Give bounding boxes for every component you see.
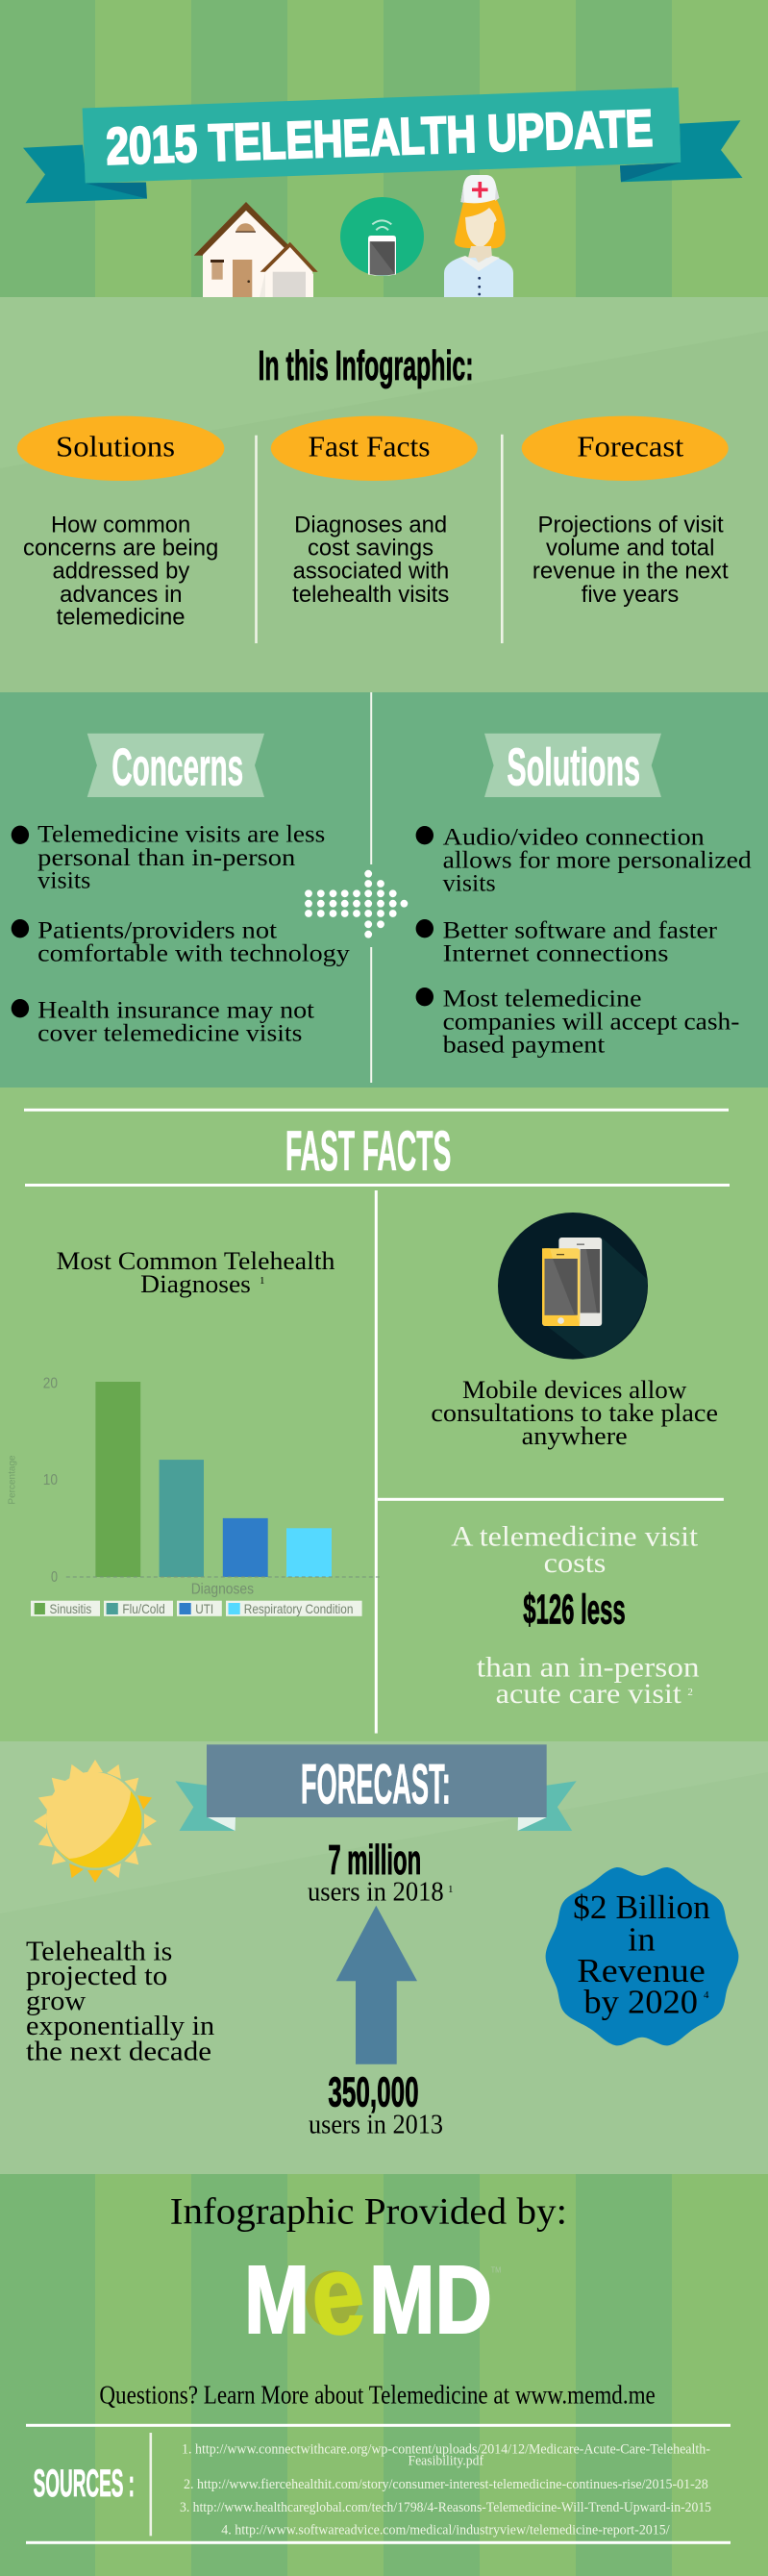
- text: 7 million: 1: [448, 1884, 454, 1895]
- icon: house: [194, 202, 318, 297]
- text: fast facts description: telehealth visits: [292, 583, 449, 608]
- header section: [0, 0, 768, 297]
- text: telehealth projection: exponentially in: [26, 2011, 215, 2041]
- text: solutions description: concerns are being: [23, 537, 218, 562]
- solution 2: [416, 918, 718, 966]
- solution 2: Better software and faster: [443, 918, 718, 944]
- concerns ribbon heading: [87, 734, 264, 797]
- oval: forecast: [522, 416, 729, 481]
- text: telehealth projection: the next decade: [26, 2036, 211, 2066]
- text: telehealth projection: projected to: [26, 1961, 167, 1991]
- oval: solutions: [17, 416, 224, 481]
- text: forecast description: Projections of visit: [538, 513, 724, 538]
- banner right fold: [620, 163, 681, 182]
- badge: revenue: 4: [704, 1989, 709, 2001]
- ribbon folds: [208, 1817, 547, 1831]
- solution 3: Most telemedicine: [443, 986, 642, 1012]
- chart title: 1: [260, 1275, 265, 1287]
- solution 3: companies will accept cash-: [443, 1010, 739, 1036]
- text: forecast description: [533, 513, 729, 608]
- heading: In this Infographic:: [258, 342, 473, 389]
- y axis labels: [43, 1376, 58, 1586]
- text: telehealth projection: [26, 1936, 215, 2066]
- icon: sun: [34, 1760, 157, 1883]
- icon: mobile phones: [498, 1213, 648, 1360]
- text: 350,000: users in 2013: [309, 2111, 443, 2140]
- list: sources: [180, 2442, 711, 2538]
- panel: fast facts: [0, 1088, 768, 1741]
- concerns list: [12, 822, 350, 1047]
- bar: respiratory condition: [286, 1528, 332, 1577]
- icon: nurse: [444, 175, 513, 297]
- text: solutions description: telemedicine: [57, 606, 186, 631]
- solutions ribbon heading: Solutions: [507, 738, 640, 797]
- solution 1: allows for more personalized: [443, 848, 752, 874]
- solution 1: Audio/video connection: [443, 825, 705, 851]
- text: 7 million: [308, 1837, 454, 1908]
- solution 1: visits: [443, 871, 496, 897]
- banner left fold: [86, 183, 147, 199]
- text: forecast description: revenue in the next: [533, 560, 729, 585]
- text: fast facts description: associated with: [293, 560, 449, 585]
- text: provided by: Infographic Provided by:: [170, 2190, 567, 2232]
- forecast ribbon: [207, 1744, 547, 1817]
- text: solutions description: advances in: [60, 583, 183, 608]
- badge: revenue: Revenue: [577, 1952, 706, 1989]
- list: sources: Feasibility.pdf: [408, 2454, 483, 2469]
- arrow: growth: [336, 1906, 417, 2064]
- text: questions: Questions? Learn More about Telemedicine at www.memd.me: [99, 2380, 656, 2409]
- text: fast facts description: Diagnoses and: [294, 513, 447, 538]
- concern 1: [12, 822, 325, 893]
- list: sources: 1. http://www.connectwithcare.org/wp-content/uploads/2014/12/Medicare-Acute-Care-Telehealth-: [182, 2442, 710, 2458]
- text: forecast description: five years: [582, 583, 679, 608]
- solution 2: Internet connections: [443, 940, 669, 966]
- text: mobile devices: [431, 1376, 718, 1450]
- text: fast facts description: [292, 513, 449, 608]
- text: 7 million: users in 2018: [308, 1878, 444, 1908]
- concern 1: visits: [37, 867, 90, 893]
- concern 2: [12, 918, 350, 966]
- text: mobile devices: Mobile devices allow: [462, 1376, 687, 1404]
- chart title: [57, 1247, 334, 1298]
- y axis labels: 10: [43, 1472, 58, 1488]
- oval: solutions: Solutions: [56, 429, 175, 463]
- solution 1: [416, 825, 752, 897]
- y axis labels: 20: [43, 1376, 58, 1392]
- text: telemedicine cost: acute care visit: [496, 1678, 682, 1710]
- concerns ribbon heading: Concerns: [111, 738, 243, 797]
- logo: MeMD: M: [244, 2246, 310, 2354]
- panel: fast facts: FAST FACTS: [285, 1120, 451, 1183]
- concern 1: personal than in-person: [37, 845, 296, 871]
- bar: flu/cold: [160, 1460, 204, 1577]
- text: mobile devices: anywhere: [522, 1422, 628, 1450]
- text: telemedicine cost: $126 less: [523, 1587, 626, 1634]
- text: 7 million: 7 million: [328, 1837, 421, 1884]
- panel: footer: [0, 2174, 768, 2576]
- panel: concerns and solutions: [0, 692, 768, 1088]
- solution 3: based payment: [443, 1032, 605, 1058]
- text: telemedicine cost: 2: [687, 1687, 693, 1698]
- panel: forecast: [0, 1741, 768, 2174]
- oval: fast facts: Fast Facts: [308, 429, 431, 463]
- concern 3: cover telemedicine visits: [37, 1021, 302, 1047]
- text: telemedicine cost: [451, 1521, 700, 1710]
- arrow: dotted right arrow: [305, 870, 408, 938]
- text: 350,000: [309, 2069, 443, 2140]
- bar: UTI: [223, 1518, 268, 1577]
- solutions ribbon heading: [484, 734, 661, 797]
- legend: Sinusitis: [50, 1601, 91, 1616]
- x axis title: Diagnoses: [191, 1581, 254, 1597]
- panel: footer: SOURCES :: [34, 2463, 135, 2505]
- text: telemedicine cost: costs: [544, 1547, 606, 1579]
- concern 3: [12, 998, 314, 1047]
- panel: in this infographic: [0, 297, 768, 692]
- chart title: Diagnoses: [140, 1270, 251, 1298]
- legend: [31, 1601, 362, 1616]
- y axis title: Percentage: [8, 1455, 17, 1505]
- chart title: Most Common Telehealth: [57, 1247, 334, 1275]
- concern 2: Patients/providers not: [37, 918, 277, 944]
- forecast ribbon left tail: [175, 1781, 235, 1831]
- text: solutions description: [23, 513, 218, 631]
- legend: Respiratory Condition: [244, 1601, 353, 1616]
- text: telehealth projection: grow: [26, 1986, 86, 2016]
- text: forecast description: volume and total: [546, 537, 714, 562]
- legend: Flu/Cold: [122, 1601, 165, 1616]
- concern 1: Telemedicine visits are less: [37, 822, 325, 848]
- concern 2: comfortable with technology: [37, 940, 350, 966]
- oval: forecast: Forecast: [577, 429, 684, 463]
- badge: revenue: by 2020: [583, 1983, 698, 2020]
- text: solutions description: How common: [51, 513, 190, 538]
- text: telemedicine cost: A telemedicine visit: [451, 1521, 699, 1552]
- text: telehealth projection: Telehealth is: [26, 1936, 172, 1966]
- panel: forecast: FORECAST:: [301, 1753, 451, 1815]
- logo: MeMD: [244, 2230, 502, 2362]
- oval: fast facts: [271, 416, 478, 481]
- list: sources: 3. http://www.healthcareglobal.com/tech/1798/4-Reasons-Telemedicine-Will-Trend-Upward-in-2015: [180, 2500, 711, 2515]
- bar: sinusitis: [95, 1382, 140, 1577]
- legend: UTI: [195, 1601, 213, 1616]
- bar chart: [8, 1376, 383, 1616]
- banner main: [83, 88, 681, 183]
- list: sources: 4. http://www.softwareadvice.com/medical/industryview/telemedicine-report-2015/: [221, 2523, 670, 2538]
- banner right tail: [620, 120, 742, 182]
- text: fast facts description: cost savings: [308, 537, 434, 562]
- solutions list: [416, 825, 752, 1058]
- badge: revenue: $2 Billion: [573, 1888, 710, 1926]
- text: telemedicine cost: than an in-person: [477, 1652, 700, 1684]
- badge: revenue: in: [628, 1920, 656, 1958]
- list: sources: 2. http://www.fiercehealthit.com/story/consumer-interest-telemedicine-continues-rise/2015-01-28: [184, 2477, 708, 2492]
- badge: revenue: [546, 1867, 738, 2045]
- y axis labels: 0: [51, 1569, 58, 1586]
- concern 3: Health insurance may not: [37, 998, 314, 1024]
- text: 350,000: 350,000: [328, 2069, 419, 2116]
- text: mobile devices: consultations to take place: [431, 1399, 718, 1427]
- logo: MeMD: TM: [491, 2265, 502, 2275]
- icon: smartphone with wifi: [340, 197, 424, 276]
- logo: MeMD: MD: [369, 2246, 492, 2354]
- logo: MeMD: e: [305, 2230, 370, 2362]
- text: solutions description: addressed by: [52, 560, 189, 585]
- forecast ribbon right tail: [518, 1781, 577, 1831]
- banner left tail: [23, 145, 147, 203]
- solution 3: [416, 986, 739, 1058]
